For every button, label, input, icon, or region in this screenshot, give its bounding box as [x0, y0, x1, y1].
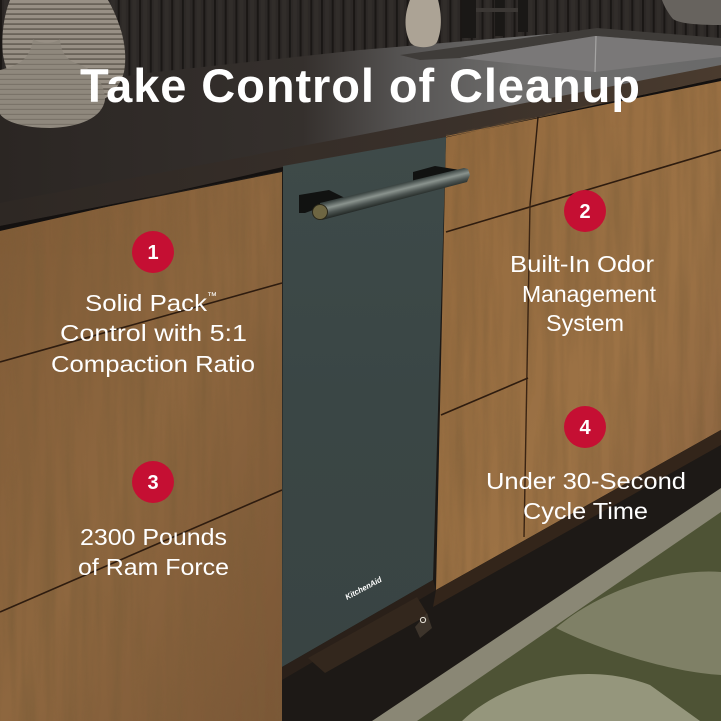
vase: ribbed large [2, 0, 125, 110]
callout 1 text: Compaction Ratio [51, 351, 255, 377]
callout 1 text: Control with 5:1 [60, 320, 247, 346]
callout 1 text: ™ [207, 291, 217, 302]
title: Take Control of Cleanup [80, 59, 640, 112]
utensil holder [462, 0, 528, 38]
countertop [0, 30, 721, 210]
callout 3 text [78, 524, 229, 580]
callout 2 text: System [546, 310, 624, 336]
callout 3 [78, 461, 229, 580]
badge 4: 4 [579, 417, 591, 439]
stone bowl [662, 0, 721, 25]
badge 3 [132, 461, 174, 503]
callout 1 text [51, 290, 255, 377]
rug [372, 488, 721, 721]
callout 2 text [510, 251, 657, 336]
callout 2 [510, 190, 657, 336]
toe kick strip [433, 430, 721, 607]
callout 4 text [486, 468, 686, 524]
countertop edge [0, 65, 721, 226]
kick plate [308, 597, 432, 673]
callout 4 text: Under 30-Second [486, 468, 686, 494]
handle [299, 166, 470, 220]
backsplash [0, 0, 721, 110]
badge 2 [564, 190, 606, 232]
badge 3: 3 [147, 472, 159, 494]
badge 4 [564, 406, 606, 448]
badge 1 [132, 231, 174, 273]
badge 1: 1 [147, 242, 159, 264]
left cabinet doors [0, 170, 282, 721]
callout 1 [51, 231, 255, 377]
badge 2: 2 [579, 201, 591, 223]
floor [282, 430, 721, 721]
callout 2 text: Management [522, 281, 657, 307]
panel bottom edge [282, 580, 436, 680]
callout 2 text: Built-In Odor [510, 251, 654, 277]
appliance panel [282, 137, 446, 667]
callout 3 text: 2300 Pounds [80, 524, 227, 550]
brand logo: KitchenAid [344, 575, 384, 602]
callout 4 text: Cycle Time [523, 498, 648, 524]
vase: small stone [406, 0, 441, 47]
vase: squat front [0, 39, 105, 128]
callout 3 text: of Ram Force [78, 554, 229, 580]
countertop shadow [0, 78, 721, 231]
callout 1 text: Solid Pack [85, 290, 208, 316]
sink [400, 28, 721, 72]
right cabinet doors [436, 78, 721, 590]
callout 4 [486, 406, 686, 524]
